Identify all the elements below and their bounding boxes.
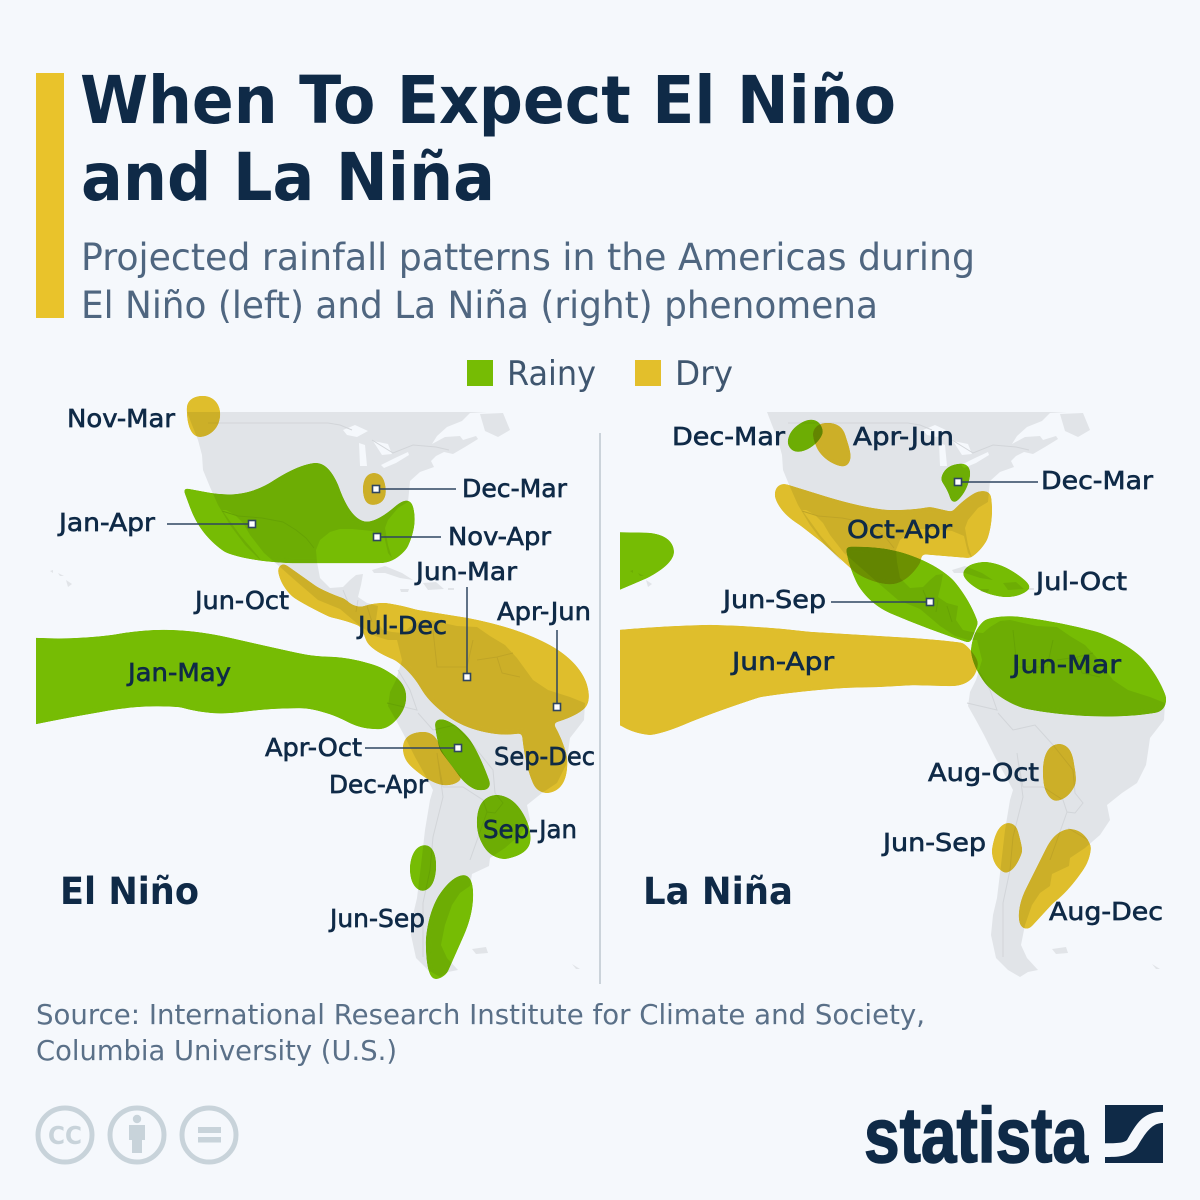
region: Aug-Dec dry [1019, 829, 1091, 929]
period labels: Oct-Apr [847, 515, 953, 544]
period labels: Nov-Mar [67, 404, 176, 433]
period labels: Jul-Dec [356, 611, 447, 640]
period labels: Dec-Mar [462, 474, 568, 503]
period labels: Jun-Apr [730, 647, 835, 676]
region: Jun-Sep rainy [426, 875, 473, 979]
region: Jun-Mar rainy [971, 616, 1166, 716]
region: Jul-Oct rainy [963, 562, 1030, 597]
panel: El Niño map [20, 396, 595, 979]
period labels: Apr-Jun [497, 597, 591, 626]
period labels: Jan-Apr [57, 508, 156, 537]
region: Pacific rainy [620, 532, 674, 590]
period labels: Nov-Apr [448, 522, 552, 551]
region: Nov-Mar dry [187, 396, 220, 437]
period labels [672, 422, 1163, 926]
icon: creative commons licence: CC [48, 1121, 82, 1150]
period labels: Jun-Sep [721, 585, 826, 614]
period labels: Dec-Mar [672, 422, 786, 451]
period labels: Jun-Mar [414, 557, 518, 586]
region: Jan-Apr and Nov-Apr rainy [183, 463, 415, 563]
region: Aug-Oct dry [1043, 744, 1076, 801]
period labels: Jun-Mar [1010, 650, 1122, 679]
panel: La Niña map [600, 412, 1166, 977]
logo: statista mark [1105, 1105, 1163, 1163]
region: Apr-Oct rainy [435, 719, 490, 790]
region: Jun-Sep dry [992, 823, 1022, 873]
period labels: Jan-May [126, 658, 231, 687]
heading: El Niño: El Niño [60, 870, 199, 913]
period labels: Jul-Oct [1034, 567, 1127, 596]
region: Jun-Apr dry [600, 625, 978, 735]
legend [467, 354, 733, 394]
period labels: Aug-Oct [928, 758, 1039, 787]
period labels: Jun-Sep [328, 904, 425, 933]
title: and La Niña [81, 139, 495, 216]
period labels: Dec-Mar [1041, 466, 1154, 495]
connectors and markers [167, 486, 560, 752]
period labels: Jun-Oct [193, 586, 289, 615]
source: Source: International Research Institute for Climate and Society, [36, 998, 925, 1031]
logo: statista wordmark: statista [864, 1091, 1088, 1179]
region: Jun-Sep rainy [846, 547, 978, 643]
region: Dec-Mar rainy [941, 464, 970, 502]
period labels: Sep-Dec [494, 742, 595, 771]
region: Jun-Oct and Jun-Mar dry [278, 564, 589, 793]
region: Jan-May rainy [20, 630, 406, 729]
region: Dec-Mar dry [363, 473, 386, 505]
region: Sep-Jan rainy [477, 795, 530, 859]
region: Dec-Mar northwest rainy [788, 420, 823, 452]
region: Oct-Apr dry [775, 484, 992, 584]
land map [50, 412, 585, 977]
legend: Rainy [507, 354, 596, 394]
title accent bar [36, 73, 64, 318]
divider [599, 433, 601, 984]
region: Apr-Jun dry [813, 423, 850, 466]
source: Columbia University (U.S.) [36, 1034, 397, 1067]
period labels: Sep-Jan [483, 815, 577, 844]
subtitle: Projected rainfall patterns in the Americas during [81, 236, 975, 279]
icon: creative commons licence [38, 1108, 236, 1162]
subtitle: El Niño (left) and La Niña (right) phenomena [81, 284, 878, 327]
period labels: Aug-Dec [1049, 897, 1163, 926]
legend: Dry [675, 354, 733, 394]
region: Dec-Apr dry [403, 732, 462, 785]
period labels: Apr-Jun [853, 422, 954, 451]
land map [630, 412, 1165, 977]
connectors and markers [831, 478, 1038, 606]
region: central Chile rainy [410, 845, 436, 891]
period labels: Dec-Apr [329, 770, 429, 799]
period labels: Apr-Oct [265, 733, 362, 762]
period labels [57, 404, 595, 933]
title: When To Expect El Niño [80, 62, 896, 139]
heading: La Niña: La Niña [643, 870, 793, 913]
period labels: Jun-Sep [881, 828, 986, 857]
